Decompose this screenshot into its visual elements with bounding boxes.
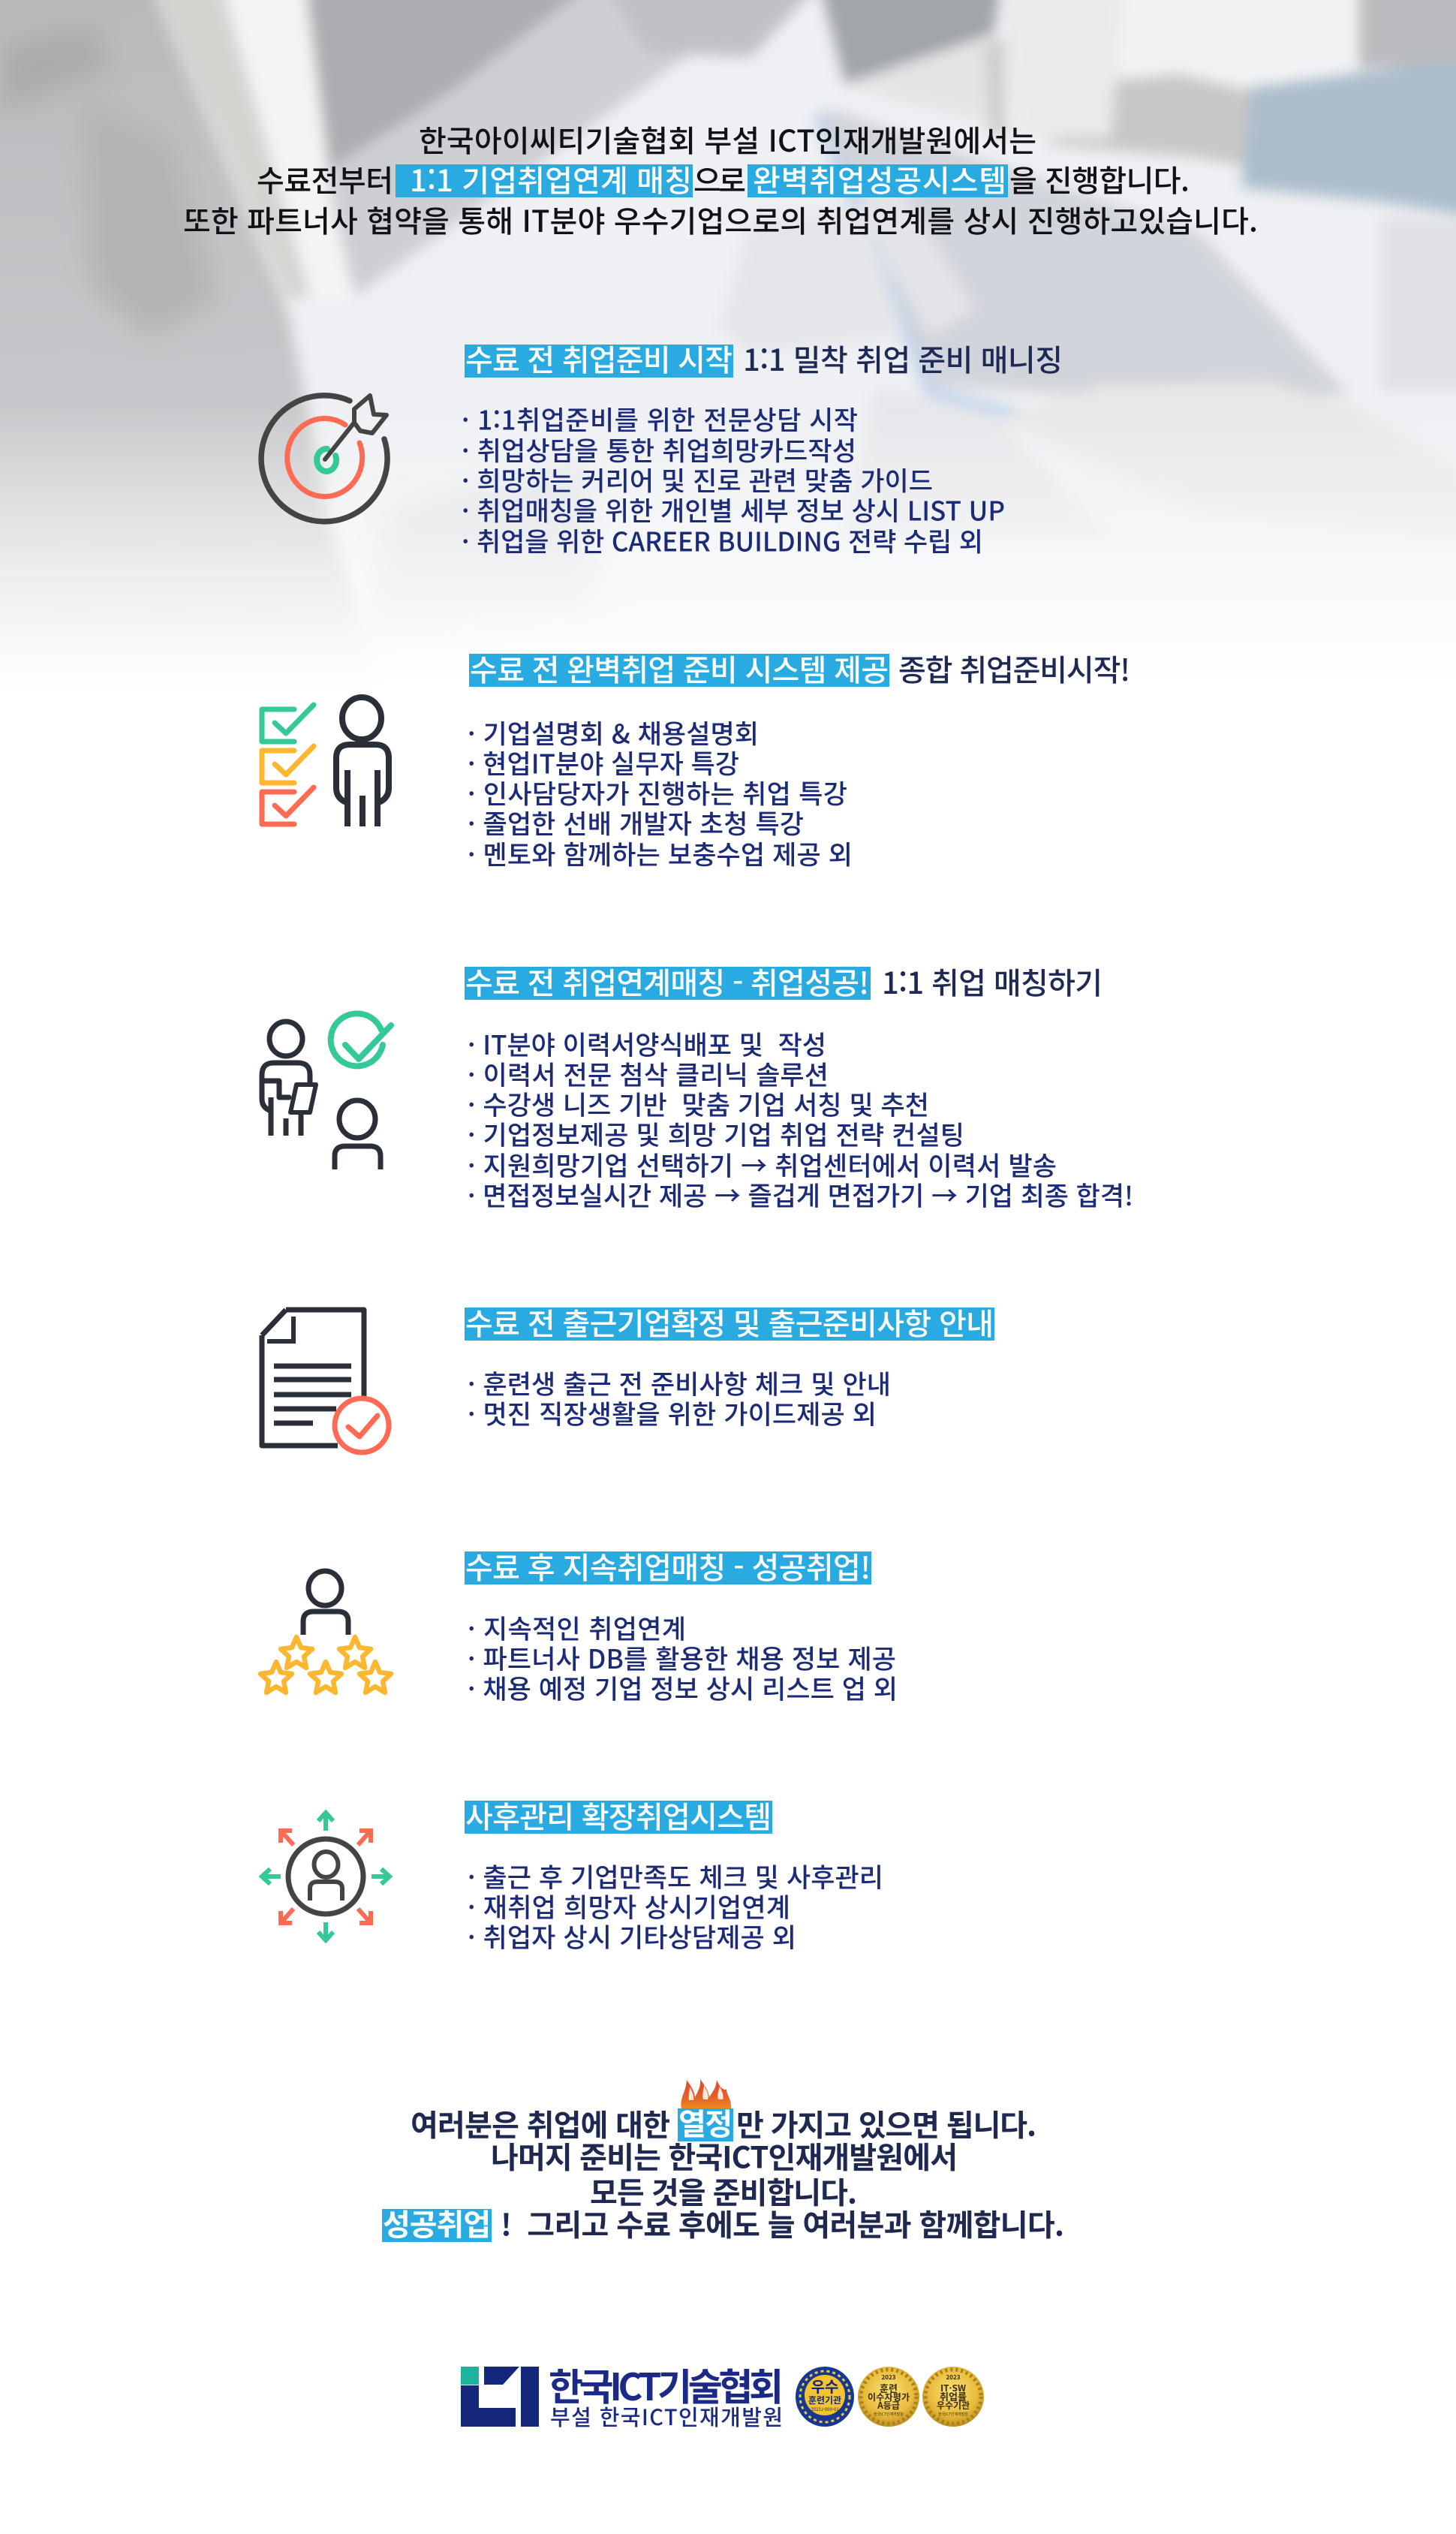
section 4: list (468, 1364, 891, 1432)
section 6: list (468, 1857, 883, 1955)
section 1: list: · 취업매칭을 위한 개인별 세부 정보 상시 LIST UP (462, 491, 1005, 528)
section 1: list: · 취업을 위한 CAREER BUILDING 전략 수립 외 (462, 521, 983, 560)
section 1: icon target (261, 396, 387, 522)
section 2: heading: 수료 전 완벽취업 준비 시스템 제공 (470, 646, 889, 690)
intro paragraph: 을 진행합니다. (1009, 157, 1190, 200)
section 1: list: · 취업상담을 통한 취업희망카드작성 (462, 431, 856, 468)
badge: excellent training institution: 우수 (811, 2375, 838, 2397)
section 1: heading (465, 336, 1063, 380)
closing message: 성공취업 (383, 2201, 491, 2244)
section 5: list: · 파트너사 DB를 활용한 채용 정보 제공 (468, 1639, 896, 1677)
section 2: list (468, 713, 853, 872)
section 3: list: · IT분야 이력서양식배포 및 작성 (468, 1025, 826, 1063)
section 3: heading (465, 959, 1103, 1003)
section 1: list: · 1:1취업준비를 위한 전문상담 시작 (462, 399, 858, 438)
section 6: list: · 취업자 상시 기타상담제공 외 (468, 1917, 796, 1955)
badge: excellent training institution: 2023J-099-01 (811, 2406, 839, 2412)
closing message: 여러분은 취업에 대한 (411, 2102, 670, 2145)
section 6: icon person with arrows (262, 1813, 390, 1940)
section 2: list: · 현업IT분야 실무자 특강 (468, 743, 739, 782)
section 6: heading: 사후관리 확장취업시스템 (465, 1793, 772, 1837)
closing message: 나머지 준비는 한국ICT인재개발원에서 (491, 2133, 958, 2177)
badge: IT SW employment rate: 한국ICT인재개발원 (938, 2412, 968, 2417)
section 3: heading: 수료 전 취업연계매칭 - 취업성공! (465, 959, 869, 1003)
intro paragraph: 또한 파트너사 협약을 통해 IT분야 우수기업으로의 취업연계를 상시 진행하고있습니다. (183, 197, 1258, 241)
section 4: list: · 멋진 직장생활을 위한 가이드제공 외 (468, 1394, 877, 1432)
section 2: icon checklist and person (262, 697, 389, 826)
badge: IT SW employment rate: IT·SW (940, 2382, 966, 2394)
section 5: list (468, 1609, 898, 1707)
badge: trainee evaluation A grade: 2023 (882, 2373, 896, 2382)
section 1: list: · 희망하는 커리어 및 진로 관련 맞춤 가이드 (462, 461, 933, 498)
section 2: heading: 종합 취업준비시작! (898, 646, 1130, 690)
badge: IT SW employment rate: 우수기관 (937, 2399, 970, 2412)
intro paragraph: 1:1 기업취업연계 매칭 (410, 157, 692, 200)
section 3: list: · 면접정보실시간 제공 → 즐겁게 면접가기 → 기업 최종 합격! (468, 1175, 1133, 1214)
section 3: icon consultant and candidate (262, 1013, 391, 1169)
intro paragraph: 완벽취업성공시스템 (753, 157, 1006, 200)
closing message: 만 가지고 있으면 됩니다. (736, 2102, 1036, 2145)
section 5: icon person and stars (260, 1571, 391, 1693)
section 5: heading: 수료 후 지속취업매칭 - 성공취업! (465, 1544, 871, 1588)
closing message: 열정 (678, 2100, 733, 2144)
badge: excellent training institution: 훈련기관 (808, 2394, 841, 2406)
badge: IT SW employment rate: 2023 (946, 2373, 961, 2382)
section 2: list: · 멘토와 함께하는 보충수업 제공 외 (468, 835, 853, 872)
footer logo mark (461, 2367, 539, 2427)
badge: IT SW employment rate (922, 2367, 984, 2427)
intro paragraph: 한국아이씨티기술협회 부설 ICT인재개발원에서는 (419, 117, 1036, 161)
section 3: list: · 기업정보제공 및 희망 기업 취업 전략 컨설팅 (468, 1115, 964, 1153)
section 6: list: · 재취업 희망자 상시기업연계 (468, 1887, 790, 1925)
badge: trainee evaluation A grade: 훈련 (880, 2381, 898, 2395)
icon: flame (681, 2079, 731, 2108)
badge: excellent training institution (796, 2367, 854, 2427)
section 3: heading: 1:1 취업 매칭하기 (882, 959, 1103, 1003)
closing message: 모든 것을 준비합니다. (590, 2169, 857, 2213)
section 1: list (462, 399, 1005, 560)
footer organisation name: 한국ICT기술협회 (549, 2358, 784, 2412)
section 3: list: · 수강생 니즈 기반 맞춤 기업 서칭 및 추천 (468, 1085, 929, 1123)
intro paragraph: 수료전부터 (257, 157, 393, 200)
badge: IT SW employment rate: 취업률 (940, 2389, 967, 2403)
section 4: heading: 수료 전 출근기업확정 및 출근준비사항 안내 (465, 1300, 994, 1344)
badge: trainee evaluation A grade: 한국ICT인재개발원 (874, 2412, 904, 2417)
section 4: icon document with check (262, 1310, 389, 1452)
section 2: list: · 졸업한 선배 개발자 초청 특강 (468, 803, 804, 842)
section 6: list: · 출근 후 기업만족도 체크 및 사후관리 (468, 1857, 883, 1895)
section 2: heading (469, 646, 1130, 690)
section 3: list: · 이력서 전문 첨삭 클리닉 솔루션 (468, 1055, 829, 1093)
section 5: list: · 채용 예정 기업 정보 상시 리스트 업 외 (468, 1669, 898, 1707)
section 5: list: · 지속적인 취업연계 (468, 1609, 686, 1647)
intro paragraph (183, 117, 1258, 241)
section 1: heading: 수료 전 취업준비 시작 (465, 336, 733, 380)
footer organisation name: 부설 한국ICT인재개발원 (550, 2400, 783, 2432)
closing message (382, 2100, 1064, 2244)
section 4: list: · 훈련생 출근 전 준비사항 체크 및 안내 (468, 1364, 891, 1402)
badge: trainee evaluation A grade: 이수자평가 (868, 2391, 910, 2403)
intro paragraph: 으로 (693, 157, 746, 200)
section 3: list (468, 1025, 1133, 1214)
badge: trainee evaluation A grade: A등급 (877, 2399, 900, 2412)
section 2: list: · 기업설명회 & 채용설명회 (468, 713, 759, 752)
section 1: heading: 1:1 밀착 취업 준비 매니징 (743, 336, 1063, 380)
section 3: list: · 지원희망기업 선택하기 → 취업센터에서 이력서 발송 (468, 1145, 1057, 1184)
badge: trainee evaluation A grade (858, 2367, 919, 2427)
closing message: ! 그리고 수료 후에도 늘 여러분과 함께합니다. (501, 2201, 1064, 2244)
section 2: list: · 인사담당자가 진행하는 취업 특강 (468, 773, 847, 812)
background photo: office desk with laptops (0, 0, 1456, 739)
